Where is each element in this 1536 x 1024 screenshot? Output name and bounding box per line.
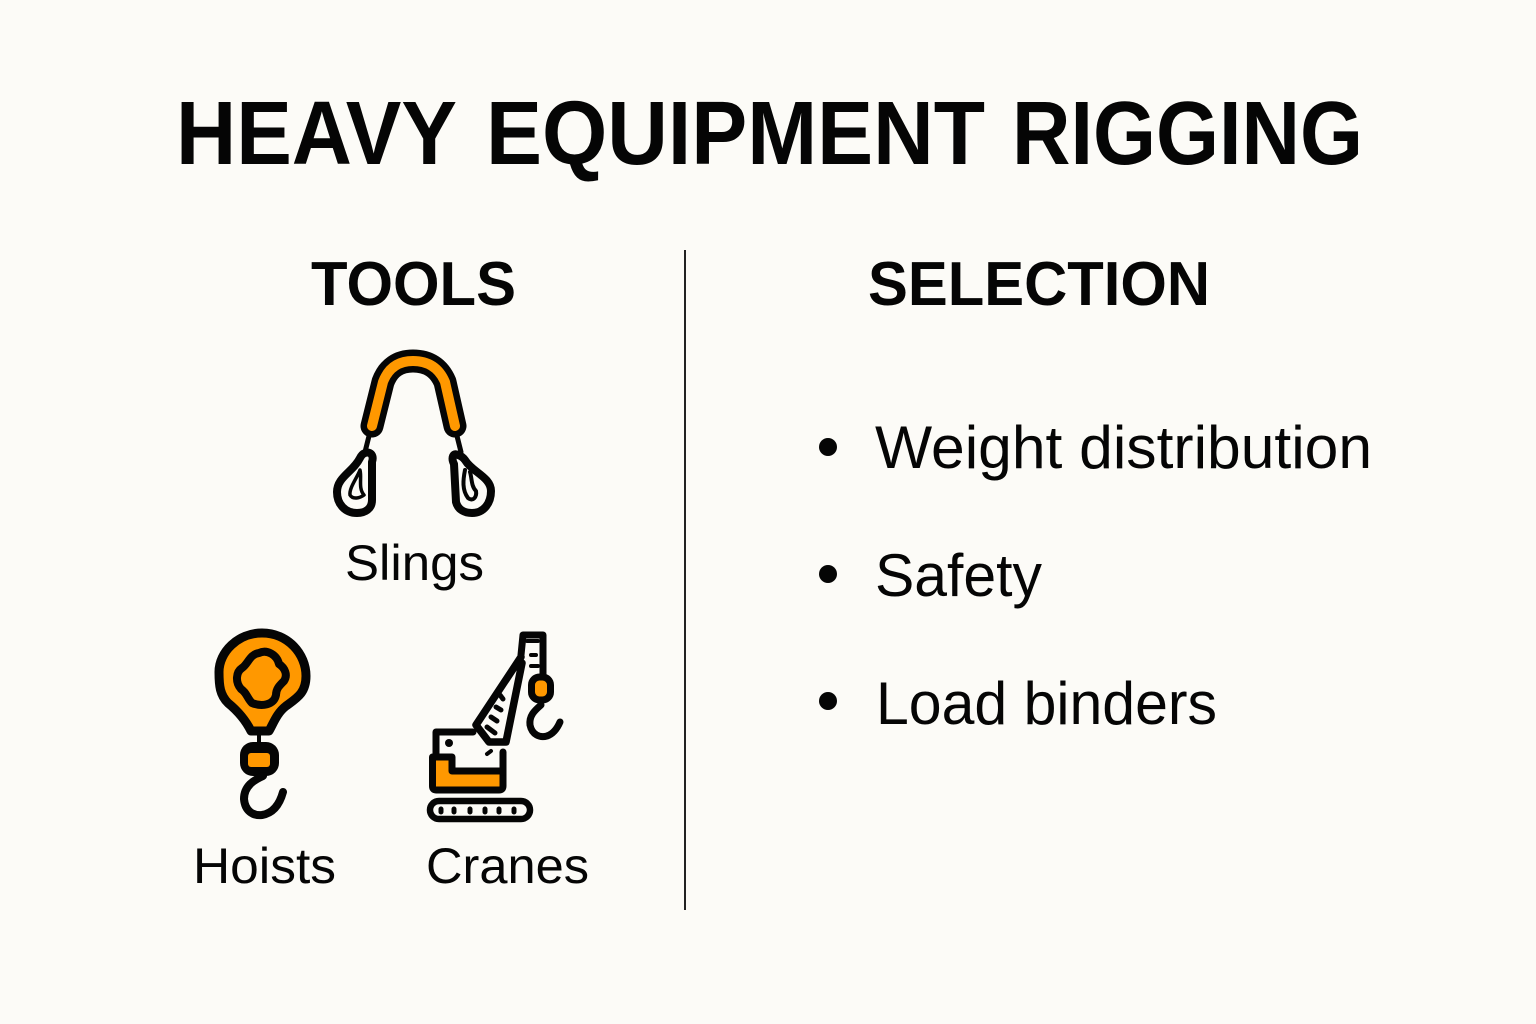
- label: slings: Slings: [345, 535, 484, 591]
- list item: safety: Safety: [875, 542, 1042, 609]
- heading: selection: SELECTION: [868, 250, 1210, 319]
- title: RIGGING: [1012, 84, 1363, 184]
- panel: tools: [193, 250, 589, 894]
- title: [176, 84, 1363, 184]
- list item: load binders: Load binders: [876, 670, 1217, 737]
- label: cranes: Cranes: [426, 838, 589, 894]
- icon: slings: [337, 361, 491, 513]
- list item: weight distribution: Weight distribution: [875, 414, 1372, 481]
- heading: tools: TOOLS: [311, 250, 516, 319]
- icon: crane: [430, 635, 560, 819]
- title: HEAVY: [176, 84, 457, 184]
- title: EQUIPMENT: [486, 84, 985, 184]
- label: hoists: Hoists: [193, 838, 336, 894]
- panel: selection: [819, 250, 1372, 737]
- icon: hoist: [219, 633, 306, 815]
